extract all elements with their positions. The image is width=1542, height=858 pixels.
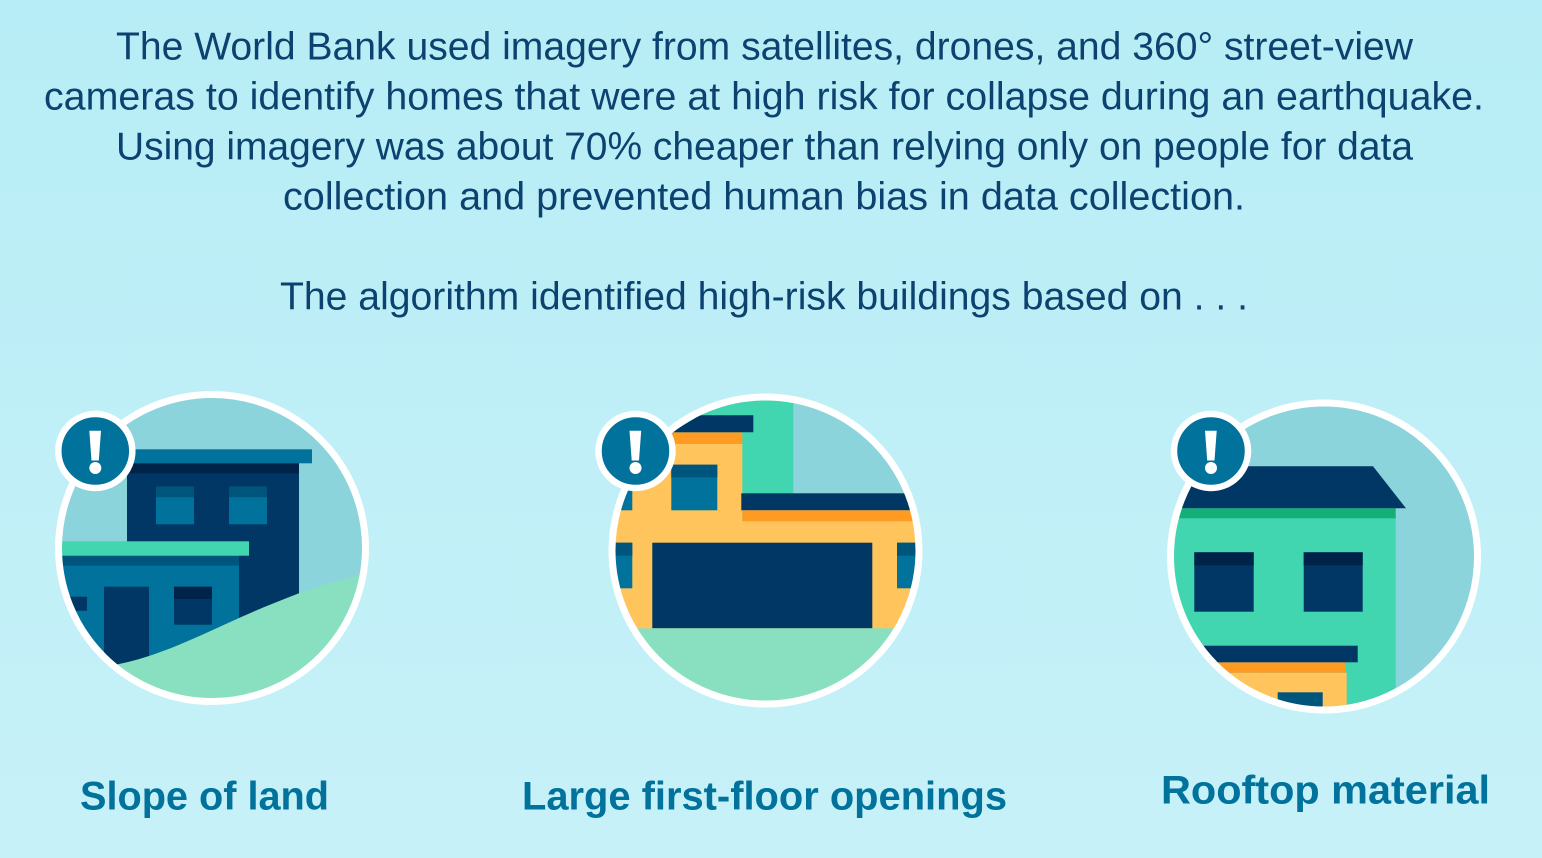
label: rooftop material: Rooftop material	[1161, 768, 1490, 812]
illustration: slope of land	[55, 391, 375, 720]
intro paragraph: cameras to identify homes that were at high risk for collapse during an earthquake.	[44, 76, 1484, 118]
icon: alert badge, rooftop	[1174, 414, 1248, 488]
label: large first-floor openings: Large first-floor openings	[522, 774, 1007, 818]
label: slope of land: Slope of land	[80, 774, 329, 818]
intro paragraph	[44, 26, 1484, 218]
intro paragraph: collection and prevented human bias in data collection.	[283, 176, 1245, 218]
illustration: large first-floor openings	[608, 393, 927, 708]
illustration: rooftop material	[1167, 399, 1482, 718]
intro paragraph: Using imagery was about 70% cheaper than relying only on people for data	[116, 126, 1414, 168]
icon: alert badge, slope	[58, 414, 132, 488]
lead-in sentence: The algorithm identified high-risk buildings based on . . .	[280, 276, 1248, 318]
intro paragraph: The World Bank used imagery from satellites, drones, and 360° street-view	[116, 26, 1413, 68]
icon: alert badge, openings	[598, 414, 672, 488]
